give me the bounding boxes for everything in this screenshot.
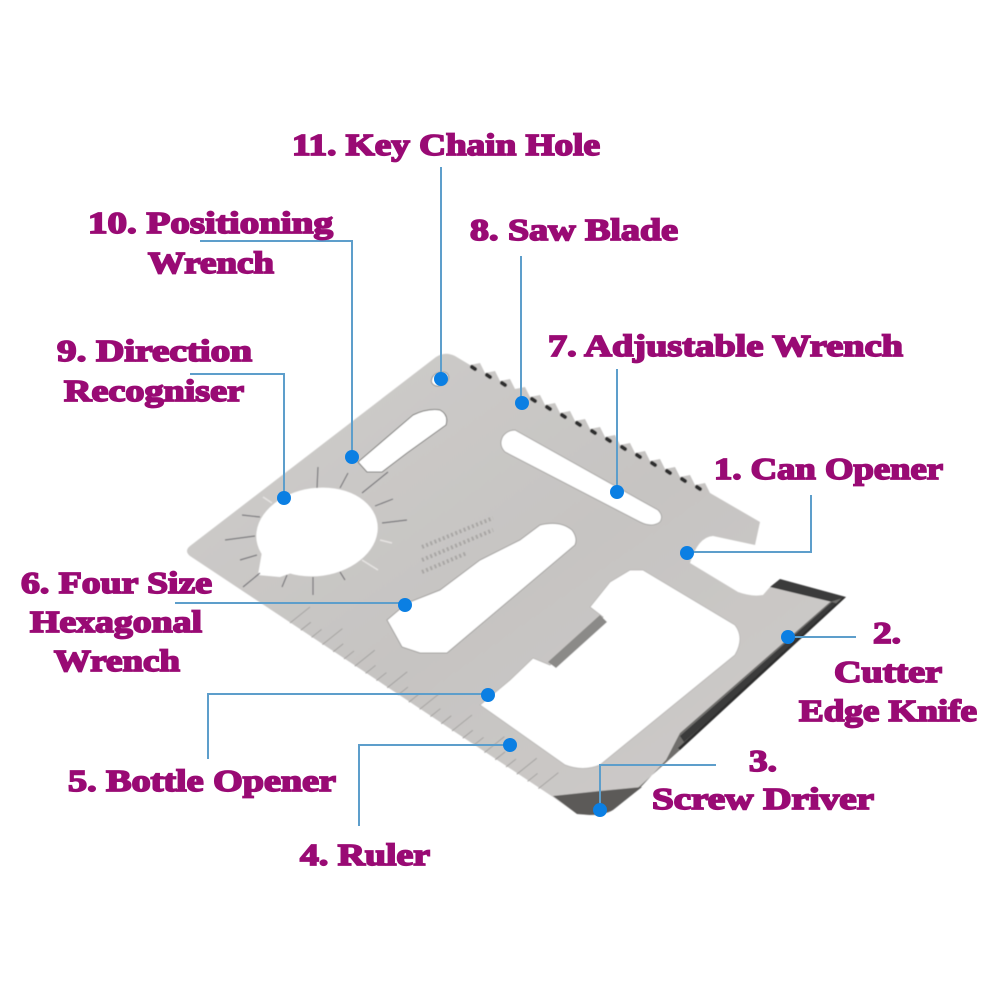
marker dot (434, 372, 448, 386)
label: Recogniser (64, 373, 244, 408)
callout: 6 four size hexagonal wrench (21, 565, 412, 678)
marker dot (503, 738, 517, 752)
leader line (687, 495, 811, 552)
marker dot (680, 546, 694, 560)
callout: 2 cutter edge knife (781, 615, 977, 728)
cutter edge blade (770, 579, 846, 602)
compass ticks (225, 467, 407, 595)
label: 11. Key Chain Hole (292, 127, 600, 162)
callout: 3 screw driver (593, 743, 874, 817)
marker dot (515, 396, 529, 410)
callout: 8 saw blade (470, 212, 678, 410)
embossed marks (422, 518, 493, 572)
leader line (208, 694, 488, 759)
label: 1. Can Opener (714, 451, 943, 486)
marker dot (277, 491, 291, 505)
screwdriver bevel (553, 787, 642, 815)
callout: 9 direction recogniser (57, 333, 291, 505)
key chain hole (429, 369, 451, 389)
leader line (359, 745, 510, 826)
marker dot (345, 450, 359, 464)
label: 6. Four Size (21, 565, 212, 600)
label: 7. Adjustable Wrench (548, 328, 903, 363)
label: Wrench (54, 643, 180, 678)
marker dot (610, 485, 624, 499)
hexagonal wrench slot (387, 523, 576, 653)
leader line (440, 167, 442, 378)
card body (187, 354, 846, 815)
leader line (520, 256, 522, 403)
label: Edge Knife (799, 693, 977, 728)
bottle opener window (480, 570, 740, 768)
label: 10. Positioning (88, 205, 334, 240)
leader line (175, 602, 405, 604)
callout: 10 positioning wrench (88, 205, 359, 464)
callout: 7 adjustable wrench (548, 328, 903, 499)
label: Screw Driver (652, 781, 874, 816)
multi-tool card (187, 354, 846, 815)
ruler ticks (290, 607, 558, 789)
leader line (190, 374, 284, 498)
callout: 11 key chain hole (292, 127, 600, 386)
label: Hexagonal (30, 604, 202, 639)
leader line (616, 369, 618, 492)
leader line (788, 636, 856, 638)
marker dot (781, 630, 795, 644)
leader line (200, 241, 352, 457)
callout: 1 can opener (680, 451, 943, 560)
callout: 5 bottle opener (68, 688, 495, 798)
callout: 4 ruler (300, 738, 517, 872)
saw teeth shadows (472, 367, 700, 489)
adjustable wrench slot (501, 430, 662, 525)
positioning wrench slot (358, 410, 447, 472)
label: 8. Saw Blade (470, 212, 678, 247)
bottle opener tab (548, 615, 607, 668)
label: 5. Bottle Opener (68, 763, 336, 798)
leader line (600, 765, 716, 810)
label: Cutter (834, 654, 942, 689)
label: 2. (873, 615, 901, 650)
marker dot (481, 688, 495, 702)
label: Wrench (148, 245, 274, 280)
direction recogniser hole (250, 480, 384, 584)
label: 9. Direction (57, 333, 252, 368)
marker dot (398, 598, 412, 612)
marker dot (593, 803, 607, 817)
label: 3. (749, 743, 777, 778)
label: 4. Ruler (300, 837, 430, 872)
